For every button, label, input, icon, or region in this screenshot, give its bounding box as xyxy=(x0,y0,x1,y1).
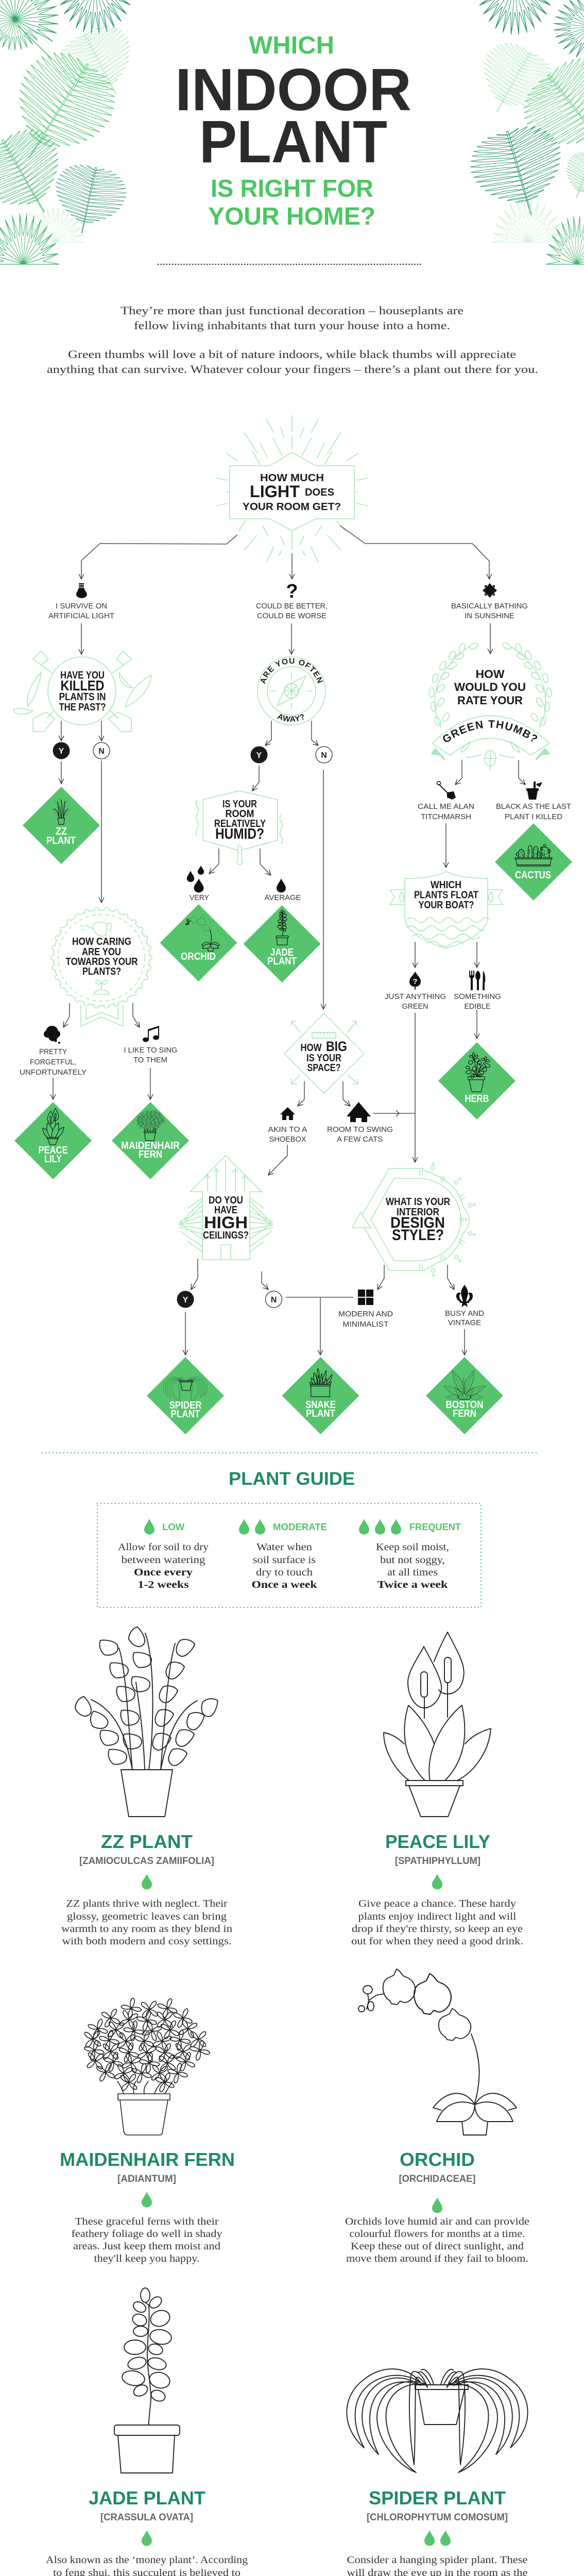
flowchart question: how much light: DOES xyxy=(305,487,334,498)
icon: dead plant pot xyxy=(526,781,542,800)
flowchart question: is your room humid: ROOM xyxy=(226,808,254,820)
plant card text: maidenhair fern: they'll keep you happy. xyxy=(94,2253,200,2264)
answer labels: space: A FEW CATS xyxy=(337,1136,383,1144)
flowchart question: how big is your space: IS YOUR xyxy=(306,1053,341,1064)
answer labels: design: MINIMALIST xyxy=(343,1320,389,1329)
title xyxy=(175,32,411,230)
answer labels: space xyxy=(268,1126,393,1144)
answer labels: caring: FORGETFUL, xyxy=(30,1058,76,1066)
icon: one drop xyxy=(277,878,286,892)
flowchart question: do you have high ceilings: CEILINGS? xyxy=(203,1230,249,1241)
legend: moderate: soil surface is xyxy=(253,1554,316,1566)
answer labels: boat: GREEN xyxy=(402,1003,428,1011)
arrows from light question xyxy=(81,526,489,579)
flowchart question: have you killed plants xyxy=(13,651,151,732)
legend: moderate: MODERATE xyxy=(273,1522,327,1532)
legend: moderate: dry to touch xyxy=(256,1567,313,1578)
answer: no xyxy=(316,747,332,763)
answer labels: caring: UNFORTUNATELY xyxy=(20,1069,87,1077)
legend: frequent xyxy=(359,1519,461,1590)
flowchart question: what is your interior design style: STYLE? xyxy=(392,1227,444,1244)
result diamond: spider plant xyxy=(147,1357,224,1434)
result diamond: orchid: ORCHID xyxy=(181,951,216,962)
flowchart question: how much light: LIGHT xyxy=(250,482,300,501)
flowchart question: how much light: YOUR ROOM GET? xyxy=(243,501,341,513)
panel: watering legend xyxy=(97,1503,481,1607)
legend: moderate: Water when xyxy=(256,1541,312,1553)
flowchart question: have you killed plants: KILLED xyxy=(61,677,104,693)
result diamond: jade plant: PLANT xyxy=(267,956,297,967)
flowchart question: how big is your space: SPACE? xyxy=(307,1062,341,1074)
result diamond: boston fern xyxy=(426,1357,503,1434)
flowchart question: how much light: HOW MUCH xyxy=(260,472,324,484)
flowchart question: which plants float your boat: PLANTS FLOAT xyxy=(414,889,478,901)
answer labels: space: SHOEBOX xyxy=(269,1136,306,1144)
flowchart question: how big is your space: BIG xyxy=(326,1039,347,1054)
legend: moderate: Once a week xyxy=(251,1579,318,1590)
legend: frequent: Keep soil moist, xyxy=(376,1541,449,1553)
plant card text: maidenhair fern: feathery foliage do well in shady xyxy=(71,2228,222,2240)
plant card text: ZZ plant: ZZ PLANT xyxy=(101,1831,193,1852)
legend: low: LOW xyxy=(162,1522,184,1532)
plant card text: orchid: Keep these out of direct sunlight, and xyxy=(351,2241,524,2252)
answer: no xyxy=(266,1291,282,1308)
result diamond: spider plant: SPIDER xyxy=(169,1400,202,1411)
title: IS RIGHT FOR xyxy=(211,175,373,202)
plant card text: orchid: colourful flowers for months at a time. xyxy=(349,2228,525,2240)
result diamond: ZZ plant: ZZ xyxy=(56,826,67,837)
intro text xyxy=(47,304,538,376)
answer labels: light: COULD BE WORSE xyxy=(257,612,327,620)
icon: fleur de lis xyxy=(456,1285,473,1307)
result diamond: spider plant: PLANT xyxy=(171,1409,200,1420)
answer labels: thumb: PLANT I KILLED xyxy=(505,813,562,821)
answer labels: thumb: CALL ME ALAN xyxy=(418,803,474,811)
illustration: jade plant xyxy=(114,2288,180,2473)
answer labels: light: BASICALLY BATHING xyxy=(451,602,528,611)
flowchart question: have you killed plants: HAVE YOU xyxy=(60,670,105,681)
answer labels: caring: TO THEM xyxy=(133,1056,167,1064)
flowchart question: how would you rate your green thumb: WOULD YOU xyxy=(454,681,526,693)
icon: light bulb xyxy=(76,583,87,598)
plant card text: jade plant xyxy=(46,2487,248,2576)
plant card text: jade plant: JADE PLANT xyxy=(89,2487,205,2509)
plant card text: spider plant: [CHLOROPHYTUM COMOSUM] xyxy=(367,2512,508,2523)
answer labels: boat xyxy=(385,993,501,1011)
flowchart question: are you often away (compass) xyxy=(257,656,326,725)
flowchart question: have you killed plants: THE PAST? xyxy=(59,702,106,713)
answer: yes: Y xyxy=(256,751,262,760)
answer labels: space: AKIN TO A xyxy=(268,1126,307,1134)
illustration: spider plant xyxy=(347,2369,528,2472)
icon: leaf with question mark xyxy=(409,972,421,990)
answer labels: humidity: AVERAGE xyxy=(265,894,301,902)
title: YOUR HOME? xyxy=(208,203,375,230)
answer labels: caring xyxy=(20,1046,177,1099)
illustration: orchid xyxy=(358,1969,517,2135)
flowchart question: how caring: PLANTS? xyxy=(82,966,121,977)
plant card text: maidenhair fern xyxy=(60,2149,235,2264)
plant card text: peace lily: plants enjoy indirect light and will xyxy=(358,1911,517,1922)
plant card text: ZZ plant: with both modern and cosy settings. xyxy=(62,1936,232,1947)
flowchart question: how would you rate your green thumb: GREEN THUMB? xyxy=(443,720,538,742)
legend: low: Once every xyxy=(134,1567,193,1578)
icon: question mark: ? xyxy=(286,581,298,602)
flowchart question: how big is your space: HOW xyxy=(301,1042,322,1054)
flowchart question: do you have high ceilings: HAVE xyxy=(214,1205,237,1216)
plant card text: ZZ plant: [ZAMIOCULCAS ZAMIIFOLIA] xyxy=(79,1856,214,1867)
icon: window squares xyxy=(358,1290,373,1305)
answer labels: design xyxy=(338,1310,484,1329)
answer labels: space: ROOM TO SWING xyxy=(327,1126,393,1134)
result diamond: ZZ plant: PLANT xyxy=(46,835,76,846)
legend: low xyxy=(118,1519,209,1590)
result diamond: cactus xyxy=(495,823,572,901)
result diamond: herb xyxy=(438,1042,516,1120)
answer labels: light: IN SUNSHINE xyxy=(465,612,514,620)
flowchart question: what is your interior design style: DESIGN xyxy=(390,1214,445,1231)
flowchart question: is your room humid: HUMID? xyxy=(215,826,264,842)
plant card text: orchid: ORCHID xyxy=(400,2149,475,2170)
answer labels: light: I SURVIVE ON xyxy=(56,602,107,611)
plant card text: maidenhair fern: MAIDENHAIR FERN xyxy=(60,2149,235,2170)
result diamond: maidenhair fern: FERN xyxy=(139,1149,162,1160)
answer labels: caring: PRETTY xyxy=(39,1048,67,1056)
answer: no: N xyxy=(321,751,327,760)
illustration: maidenhair fern xyxy=(78,1995,213,2135)
result diamond: peace lily xyxy=(14,1102,92,1179)
plant card text: orchid xyxy=(345,2149,529,2264)
icon: spade xyxy=(437,781,456,800)
icon: big house xyxy=(347,1102,371,1122)
legend: frequent: FREQUENT xyxy=(409,1522,461,1532)
flowchart question: how big is your space xyxy=(284,1013,364,1093)
plant card text: peace lily: Give peace a chance. These hardy xyxy=(358,1898,516,1909)
plant card text: ZZ plant: warmth to any room as they blend in xyxy=(61,1923,232,1935)
plant card text: maidenhair fern: areas. Just keep them moist and xyxy=(73,2241,220,2252)
answer labels: design: BUSY AND xyxy=(445,1310,484,1318)
flowchart question: do you have high ceilings: DO YOU xyxy=(209,1195,243,1206)
plant card text: peace lily: [SPATHIPHYLLUM] xyxy=(395,1856,480,1867)
flowchart question: what is your interior design style xyxy=(352,1163,475,1276)
answer labels: design: VINTAGE xyxy=(448,1319,481,1327)
flowchart question: is your room humid xyxy=(196,791,282,865)
plant card text: peace lily: out for when they need a good drink. xyxy=(351,1936,523,1947)
title: INDOOR xyxy=(175,56,411,123)
plant card text: orchid: [ORCHIDACEAE] xyxy=(399,2174,476,2184)
flowchart question: how would you rate your green thumb: HOW xyxy=(476,668,505,681)
intro text: Green thumbs will love a bit of nature indoors, while black thumbs will appreciate xyxy=(68,348,516,361)
flowchart question: what is your interior design style: INTERIOR xyxy=(397,1207,439,1218)
icon: leaf with question mark: ? xyxy=(413,977,418,986)
result diamond: snake plant xyxy=(282,1357,359,1434)
intro text: fellow living inhabitants that turn your house into a home. xyxy=(134,319,450,332)
icon: thought cloud xyxy=(44,1026,60,1044)
flowchart question: are you often away (compass): AWAY? xyxy=(277,714,304,722)
answer labels: boat: EDIBLE xyxy=(465,1003,491,1011)
result diamond: boston fern: FERN xyxy=(453,1408,476,1419)
icon: music note xyxy=(143,1026,159,1042)
plant card text: spider plant: Consider a hanging spider plant. These xyxy=(347,2554,528,2566)
result diamond: jade plant xyxy=(243,905,320,982)
flowchart question: how caring: ARE YOU xyxy=(82,946,121,958)
result diamond: herb: HERB xyxy=(465,1093,489,1105)
plant card text: ZZ plant: glossy, geometric leaves can bring xyxy=(67,1911,227,1922)
plant card text: maidenhair fern: [ADIANTUM] xyxy=(117,2174,176,2184)
flowchart question: have you killed plants: PLANTS IN xyxy=(59,691,106,703)
legend: frequent: at all times xyxy=(387,1567,438,1578)
answer: no xyxy=(93,742,110,759)
intro text: anything that can survive. Whatever colour your fingers – there’s a plant out there for you. xyxy=(47,363,538,376)
flowchart question: is your room humid: IS YOUR xyxy=(222,799,257,810)
result diamond: snake plant: PLANT xyxy=(306,1408,335,1419)
flowchart question: how would you rate your green thumb xyxy=(428,642,552,770)
result diamond: maidenhair fern: MAIDENHAIR xyxy=(121,1140,180,1151)
answer labels: humidity: VERY xyxy=(190,894,209,902)
plant card text: peace lily: PEACE LILY xyxy=(385,1831,490,1852)
plant card text: maidenhair fern: These graceful ferns with their xyxy=(75,2216,219,2227)
intro text: They’re more than just functional decoration – houseplants are xyxy=(121,304,463,317)
plant card text: jade plant: [CRASSULA OVATA] xyxy=(100,2512,193,2523)
answer: no: N xyxy=(271,1296,277,1304)
answer labels: boat: SOMETHING xyxy=(454,993,501,1001)
palm leaves: left cluster xyxy=(0,0,149,264)
result diamond: snake plant: SNAKE xyxy=(305,1399,336,1411)
flowchart question: is your room humid: RELATIVELY xyxy=(214,818,266,829)
legend: frequent: but not soggy, xyxy=(380,1554,445,1566)
plant card text: peace lily: drop if they're thirsty, so keep an eye xyxy=(352,1923,523,1935)
answer labels: light xyxy=(48,602,528,654)
answer labels: thumb: BLACK AS THE LAST xyxy=(496,803,571,811)
plant card text: spider plant: SPIDER PLANT xyxy=(369,2487,506,2509)
legend: moderate xyxy=(239,1519,327,1590)
plant card text: ZZ plant: ZZ plants thrive with neglect. Their xyxy=(66,1898,228,1909)
flowchart question: which plants float your boat: WHICH xyxy=(431,879,461,891)
result diamond: jade plant: JADE xyxy=(270,947,294,958)
palm leaves: right cluster xyxy=(462,0,584,264)
illustration: peace lily xyxy=(384,1632,491,1817)
result diamond: orchid xyxy=(160,904,237,981)
title: PLANT xyxy=(199,108,387,175)
flowchart question: how caring xyxy=(53,909,150,1026)
plant card text: ZZ plant xyxy=(61,1831,232,1947)
flowchart question: do you have high ceilings: HIGH xyxy=(204,1213,248,1232)
plant card text: orchid: move them around if they fail to bloom. xyxy=(346,2253,528,2264)
answer: yes: Y xyxy=(183,1296,188,1304)
flowchart question: which plants float your boat xyxy=(390,871,503,948)
legend: frequent: Twice a week xyxy=(377,1579,449,1590)
answer: yes: Y xyxy=(59,747,64,756)
answer labels: design: MODERN AND xyxy=(338,1310,393,1318)
flowchart question: how much light xyxy=(216,415,368,563)
answer labels: humidity xyxy=(190,894,301,902)
flowchart question: how caring: TOWARDS YOUR xyxy=(66,956,138,968)
title: WHICH xyxy=(249,32,334,59)
icon: three drops xyxy=(187,866,204,892)
legend: low: 1-2 weeks xyxy=(138,1579,189,1590)
plant card text: peace lily xyxy=(351,1831,523,1947)
answer labels: light: COULD BE BETTER, xyxy=(256,602,328,611)
result diamond: peace lily: LILY xyxy=(44,1154,62,1165)
flowchart question: which plants float your boat: YOUR BOAT? xyxy=(418,900,474,911)
illustration: ZZ plant xyxy=(72,1626,218,1817)
icon: small house xyxy=(280,1107,295,1120)
plant card text: spider plant xyxy=(347,2487,528,2576)
answer: yes xyxy=(177,1291,194,1308)
result diamond: maidenhair fern xyxy=(112,1102,189,1179)
answer labels: light: ARTIFICIAL LIGHT xyxy=(48,612,114,620)
heading: plant guide: PLANT GUIDE xyxy=(229,1469,355,1489)
plant card text: orchid: Orchids love humid air and can provide xyxy=(345,2216,529,2227)
result diamond: peace lily: PEACE xyxy=(38,1145,68,1156)
icon: cutlery xyxy=(469,971,485,990)
plant card text: jade plant: Also known as the ‘money plant’. According xyxy=(46,2554,248,2566)
legend: low: between watering xyxy=(122,1554,205,1566)
answer: yes xyxy=(250,746,268,764)
flowchart question: do you have high ceilings xyxy=(179,1156,273,1260)
flowchart question: how would you rate your green thumb: RATE YOUR xyxy=(457,694,523,707)
answer labels: boat: JUST ANYTHING xyxy=(385,993,446,1001)
result diamond: ZZ plant xyxy=(23,787,100,864)
result diamond: cactus: CACTUS xyxy=(515,870,551,881)
flowchart question: are you often away (compass): ARE YOU OFTEN xyxy=(261,658,323,684)
answer labels: thumb xyxy=(418,803,571,821)
flowchart question: what is your interior design style: WHAT IS YOUR xyxy=(386,1196,450,1208)
answer labels: thumb: TITCHMARSH xyxy=(421,813,471,821)
result diamond: boston fern: BOSTON xyxy=(446,1399,483,1411)
answer labels: caring: I LIKE TO SING xyxy=(124,1046,177,1055)
answer: no: N xyxy=(98,747,105,756)
icon: sun xyxy=(483,583,497,598)
answer: yes xyxy=(53,742,70,759)
legend: low: Allow for soil to dry xyxy=(118,1541,209,1553)
flowchart question: how caring: HOW CARING xyxy=(72,936,131,947)
